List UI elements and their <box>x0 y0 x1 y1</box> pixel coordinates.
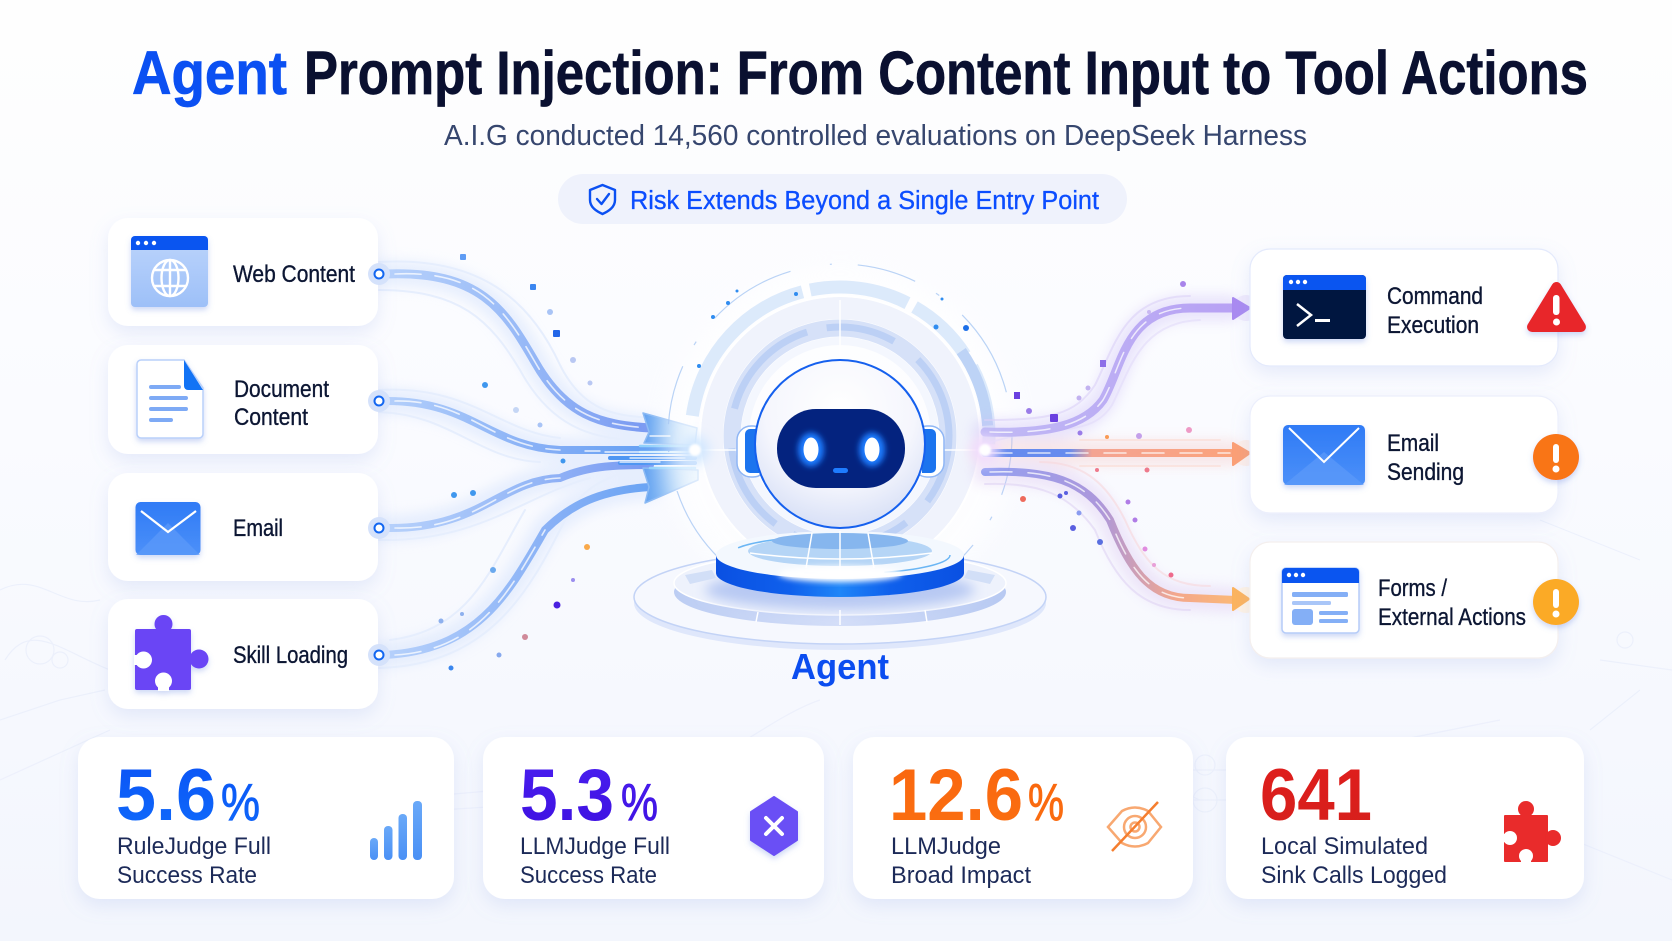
panel: document content <box>108 345 378 454</box>
icon: document <box>137 360 203 438</box>
orbit rings <box>634 230 1046 642</box>
label: Success Rate <box>117 862 257 889</box>
stat card: local simulated sink calls logged <box>1226 737 1584 899</box>
label: Sink Calls Logged <box>1261 862 1447 889</box>
arrowheads <box>585 413 698 503</box>
value: 12.6 <box>889 755 1023 836</box>
label <box>117 833 271 889</box>
label: LLMJudge Full <box>520 833 670 860</box>
highlights along flows <box>395 274 650 655</box>
icon: crossed-out eye <box>1108 802 1161 851</box>
label: Web Content <box>233 261 355 288</box>
panel: email input <box>108 473 378 581</box>
ears <box>737 426 944 477</box>
label <box>1261 833 1447 889</box>
icon: envelope <box>136 502 200 555</box>
label: Sending <box>1387 459 1464 486</box>
face screen <box>777 409 905 488</box>
stat card: LLMJudge broad impact <box>853 737 1193 899</box>
particles <box>438 254 592 670</box>
label: Command <box>1387 283 1483 310</box>
icon: yellow alert <box>1533 579 1579 625</box>
arrow: agent to command execution <box>985 308 1236 432</box>
arrow: skill loading to agent <box>385 487 650 655</box>
label: Execution <box>1387 312 1479 339</box>
label: Forms / <box>1378 575 1447 602</box>
icon: browser globe <box>131 236 208 307</box>
value: % <box>621 774 658 832</box>
subtitle: A.I.G conducted 14,560 controlled evaluations on DeepSeek Harness <box>444 120 1307 152</box>
label: RuleJudge Full <box>117 833 271 860</box>
arrowheads <box>1233 295 1259 613</box>
icon: bar chart <box>370 801 422 860</box>
robot head <box>737 360 944 528</box>
label <box>1378 575 1526 631</box>
label: Content <box>234 404 308 431</box>
icon: envelope <box>1283 425 1365 485</box>
arrow: web content to agent <box>385 274 650 428</box>
connection nodes on input cards <box>368 263 390 666</box>
label: Success Rate <box>520 862 657 889</box>
label: Broad Impact <box>891 862 1031 889</box>
icon: red warning triangle <box>1532 287 1581 327</box>
panel: forms and external actions <box>1250 542 1579 658</box>
panel: input flows into agent <box>379 254 698 670</box>
icon: web form <box>1282 568 1359 633</box>
panel: command execution <box>1250 249 1581 366</box>
label: Email <box>1387 430 1439 457</box>
label <box>1387 283 1483 339</box>
label: Skill Loading <box>233 642 348 669</box>
panel: output flows from agent <box>681 281 1259 613</box>
platform <box>634 531 1046 650</box>
highlights along flows <box>990 308 1230 598</box>
icon: shield <box>590 185 615 214</box>
particles <box>1014 281 1192 578</box>
eyes <box>798 432 885 473</box>
glow points <box>681 436 999 464</box>
icon: red puzzle piece <box>1503 801 1561 863</box>
panel: skill loading <box>108 599 378 709</box>
icon: orange alert <box>1533 434 1579 480</box>
value: 5.3 <box>520 755 614 836</box>
label: Document <box>234 376 329 403</box>
callout pill: risk extends beyond a single entry point <box>558 174 1127 224</box>
label: Local Simulated <box>1261 833 1428 860</box>
value: % <box>221 774 260 832</box>
arrow: agent to email sending <box>985 449 1236 457</box>
label: Agent: Agent <box>791 646 889 687</box>
label <box>891 833 1031 889</box>
arrow: agent to forms and external actions <box>985 472 1236 600</box>
label: Email <box>233 515 283 542</box>
stat card: RuleJudge full success rate <box>78 737 454 899</box>
label: External Actions <box>1378 604 1526 631</box>
value: 5.6 <box>116 755 216 836</box>
arrow: email to agent <box>385 465 650 528</box>
panel: email sending <box>1250 396 1579 513</box>
orbit dots <box>697 290 969 368</box>
value: 641 <box>1260 755 1372 836</box>
label <box>234 376 329 431</box>
icon: terminal <box>1283 275 1366 339</box>
label <box>1387 430 1464 486</box>
value: % <box>1028 774 1064 832</box>
label <box>520 833 670 889</box>
title: Agent <box>132 39 287 107</box>
callout pill: risk extends beyond a single entry point: Risk Extends Beyond a Single Entry Point <box>630 187 1099 215</box>
panel: agent core <box>634 230 1046 687</box>
panel: web content <box>108 218 378 326</box>
stat card: LLMJudge full success rate <box>483 737 824 899</box>
icon: hexagon with x <box>751 797 797 855</box>
arrow: document content to agent <box>385 401 690 450</box>
label: LLMJudge <box>891 833 1001 860</box>
icon: puzzle piece <box>134 615 208 691</box>
